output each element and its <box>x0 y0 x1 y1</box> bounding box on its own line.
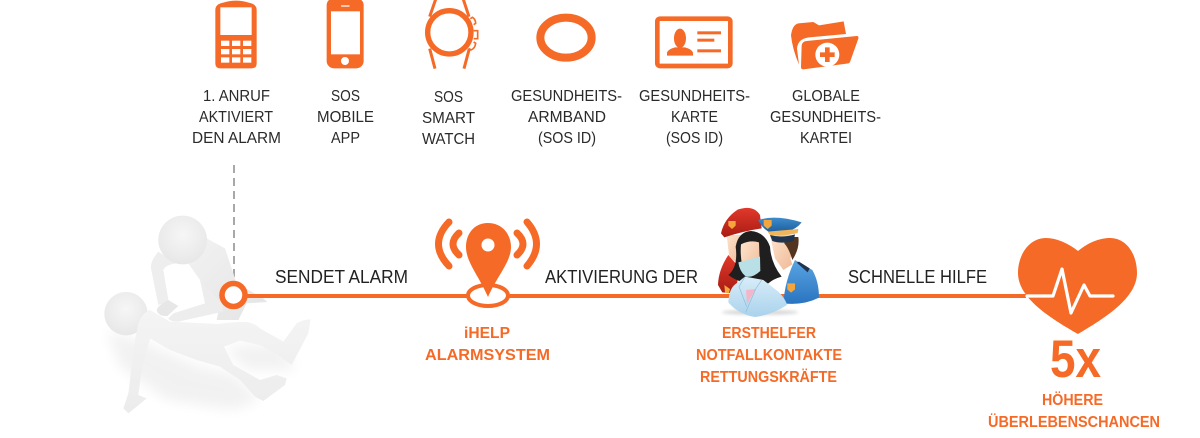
label: health card <box>639 88 750 147</box>
figure: kneeling rescuer body <box>104 216 267 335</box>
label: responder groups <box>696 325 842 386</box>
icon: medical records folder <box>791 21 858 69</box>
icon: smartphone <box>327 0 364 68</box>
label: global health record: GESUNDHEITS- <box>770 109 881 126</box>
label: health wristband: GESUNDHEITS- <box>511 88 622 105</box>
label: higher survival chances <box>988 390 1160 431</box>
label: higher survival chances: ÜBERLEBENSCHANCEN <box>988 412 1160 431</box>
label: SOS smart watch: SMART <box>422 110 475 127</box>
label: sends alarm: SENDET ALARM <box>275 267 408 287</box>
label: higher survival chances: HÖHERE <box>1042 390 1103 409</box>
label: fast help: SCHNELLE HILFE <box>848 267 987 287</box>
label: first call: 1. ANRUF <box>203 88 270 105</box>
label: health wristband: ARMBAND <box>528 109 606 126</box>
marker: alarm start point <box>222 284 245 306</box>
label: responder groups: NOTFALLKONTAKTE <box>696 347 842 364</box>
icon: mobile phone <box>215 1 257 68</box>
icon: health wristband <box>540 18 592 58</box>
label: iHELP alarm system <box>425 325 550 364</box>
figure: rescuer arms and hands <box>157 280 223 322</box>
icon: health ID card <box>657 19 730 66</box>
label: health card: KARTE <box>671 109 718 126</box>
icon: alarm location pin <box>438 222 536 306</box>
label: activation of: AKTIVIERUNG DER <box>545 267 698 287</box>
label: global health record: KARTEI <box>800 130 852 147</box>
label: SOS mobile app: APP <box>331 130 360 147</box>
label: iHELP alarm system: iHELP <box>464 325 510 342</box>
timeline line <box>240 294 1026 298</box>
label: iHELP alarm system: ALARMSYSTEM <box>425 347 550 364</box>
figure: lying patient <box>123 310 311 413</box>
illustration: person giving CPR <box>104 216 311 413</box>
label: SOS mobile app: SOS <box>331 88 360 105</box>
label: health wristband: (SOS ID) <box>538 130 596 147</box>
dashed connector from phone to person <box>233 165 235 282</box>
label: SOS smart watch: WATCH <box>422 131 475 148</box>
label: global health record <box>770 88 881 147</box>
label: global health record: GLOBALE <box>792 88 860 105</box>
label: responder groups: RETTUNGSKRÄFTE <box>700 368 837 386</box>
icon: heart with pulse <box>1018 238 1137 334</box>
illustration: first responders <box>718 208 819 317</box>
label: SOS smart watch <box>422 89 475 148</box>
label: SOS mobile app <box>317 88 374 147</box>
label: SOS smart watch: SOS <box>434 89 463 106</box>
icon: smart watch <box>428 0 478 69</box>
statistic: five times: 5x <box>1050 330 1101 389</box>
label: responder groups: ERSTHELFER <box>722 325 816 342</box>
label: SOS mobile app: MOBILE <box>317 109 374 126</box>
label: first call <box>192 88 281 147</box>
label: health card: GESUNDHEITS- <box>639 88 750 105</box>
label: first call: AKTIVIERT <box>199 109 273 126</box>
label: health wristband <box>511 88 622 147</box>
label: first call: DEN ALARM <box>192 130 281 147</box>
label: health card: (SOS ID) <box>666 130 723 147</box>
